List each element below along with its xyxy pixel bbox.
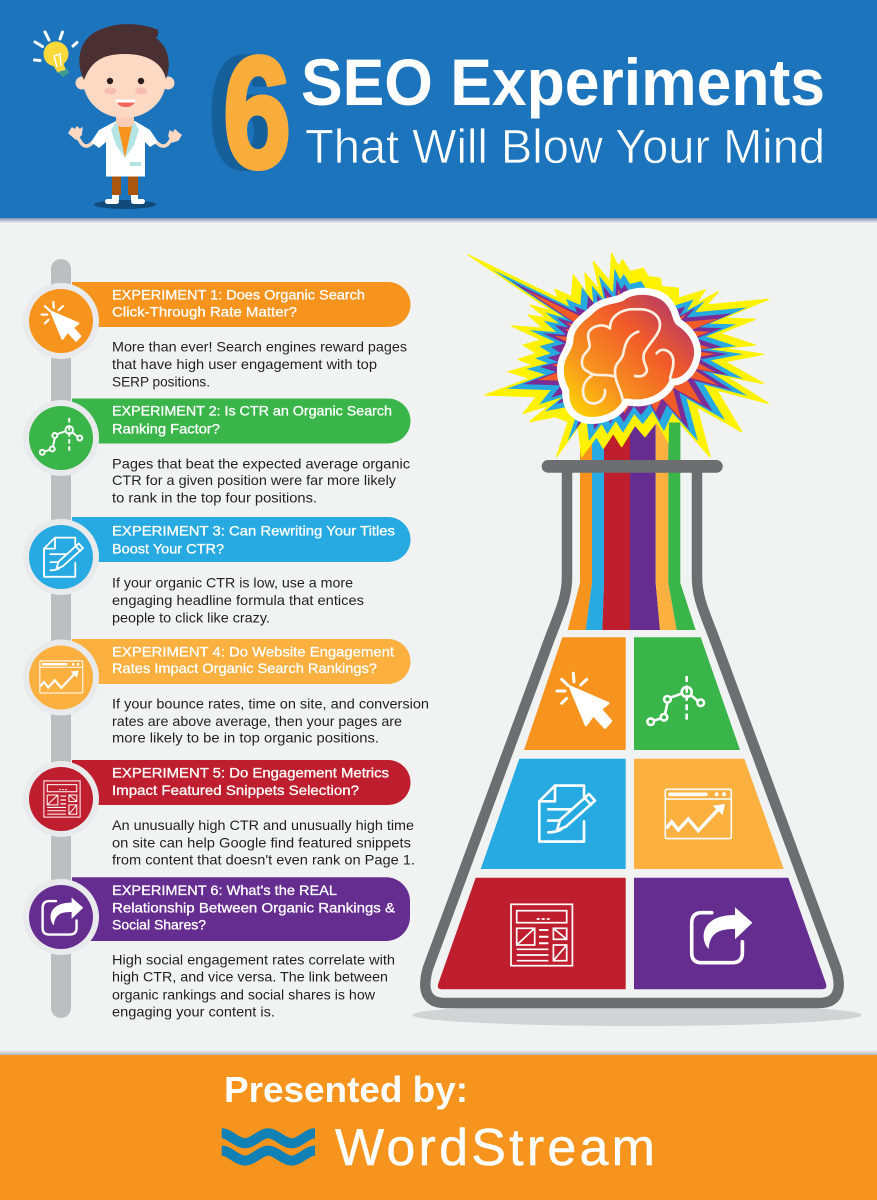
panel: flask cell cursor	[524, 637, 626, 750]
header pill	[72, 282, 411, 327]
badge ring	[23, 283, 99, 359]
icon: cursor	[557, 673, 611, 728]
description: rates are above average, then your pages are	[112, 713, 402, 729]
description: more likely to be in top organic positions.	[112, 730, 379, 746]
icon: scientist character	[69, 24, 181, 209]
description: organic rankings and social shares is how	[112, 986, 376, 1002]
icon: chart nodes	[40, 418, 82, 455]
description: high CTR, and vice versa. The link between	[112, 969, 388, 985]
heading	[112, 882, 396, 933]
icon: brain	[564, 295, 694, 417]
panel: flask cell document	[481, 759, 626, 869]
description: An unusually high CTR and unusually high time	[112, 817, 414, 833]
icon: cursor	[42, 302, 80, 341]
smile	[116, 100, 136, 107]
heading: Impact Featured Snippets Selection?	[112, 782, 359, 798]
title line 2: That Will Blow Your Mind	[305, 121, 825, 174]
badge	[29, 525, 93, 589]
icon: browser with trend	[40, 661, 83, 693]
description	[112, 951, 395, 1020]
face	[83, 42, 166, 118]
header banner	[0, 0, 877, 223]
presented by label: Presented by:	[224, 1069, 468, 1110]
heading	[112, 523, 395, 556]
WordStream wordmark: WordStream	[335, 1119, 655, 1177]
description: on site can help Google find featured snippets	[112, 835, 411, 851]
timeline rail	[51, 259, 71, 1018]
panel: experiment 4	[23, 639, 429, 746]
title line 1: SEO Experiments	[301, 45, 825, 119]
heading: EXPERIMENT 5: Do Engagement Metrics	[112, 765, 389, 781]
header pill	[72, 639, 411, 684]
hair	[79, 24, 169, 80]
heading: EXPERIMENT 2: Is CTR an Organic Search	[112, 403, 392, 419]
explosion burst	[468, 253, 768, 457]
panel: experiment 2	[23, 398, 411, 506]
icon: WordStream waves logo	[222, 1133, 315, 1161]
green stripe top	[668, 422, 680, 462]
heading	[112, 765, 389, 798]
heading: EXPERIMENT 4: Do Website Engagement	[112, 643, 394, 659]
description: from content that doesn't even rank on Page 1.	[112, 851, 415, 867]
badge	[29, 289, 93, 353]
icon: share	[692, 907, 752, 963]
description: to rank in the top four positions.	[112, 490, 317, 506]
flask ground shadow	[412, 1004, 862, 1026]
panel: experiment 3	[23, 517, 411, 626]
badge	[29, 767, 93, 831]
legs and shoes	[105, 174, 145, 204]
panel: flask cell share	[634, 878, 826, 989]
neck	[116, 112, 134, 127]
big number 6: 6	[216, 25, 284, 201]
icon: share	[43, 897, 83, 935]
icon: browser with trend	[665, 789, 731, 839]
heading: Boost Your CTR?	[112, 540, 224, 556]
big number 6: 6	[209, 25, 277, 201]
description: Pages that beat the expected average organic	[112, 455, 410, 471]
heading: EXPERIMENT 6: What's the REAL	[112, 882, 337, 898]
heading	[112, 403, 392, 436]
heading: Click-Through Rate Matter?	[112, 304, 297, 320]
shadow under feet	[94, 200, 156, 209]
header pill	[72, 517, 411, 562]
panel: experiment 1	[23, 282, 411, 390]
heading: EXPERIMENT 3: Can Rewriting Your Titles	[112, 523, 395, 539]
badge ring	[23, 400, 99, 476]
heading: Relationship Between Organic Rankings &	[112, 900, 396, 916]
description: that have high user engagement with top	[112, 356, 377, 372]
description	[112, 695, 429, 746]
description: engaging headline formula that entices	[112, 592, 364, 608]
flask outline	[425, 472, 839, 1003]
heading	[112, 643, 394, 676]
rainbow liquid stripes	[568, 423, 696, 630]
badge	[29, 885, 93, 949]
badge ring	[23, 761, 99, 837]
panel: flask cell chart	[634, 637, 740, 750]
description: engaging your content is.	[112, 1004, 275, 1020]
heading: Rates Impact Organic Search Rankings?	[112, 660, 377, 676]
description: people to click like crazy.	[112, 610, 270, 626]
icon: document and pen	[539, 786, 595, 842]
icon: lightbulb	[34, 32, 77, 77]
heading: EXPERIMENT 1: Does Organic Search	[112, 286, 365, 302]
description: High social engagement rates correlate with	[112, 951, 395, 967]
panel: experiment 6	[23, 877, 410, 1020]
badge ring	[23, 879, 99, 955]
description	[112, 817, 415, 867]
lab coat	[91, 121, 158, 176]
panel: experiment 5	[23, 760, 415, 867]
panel: flask cell news	[438, 878, 626, 989]
badge	[29, 406, 93, 470]
description: CTR for a given position were far more likely	[112, 472, 396, 488]
ears	[76, 76, 174, 90]
arms and hands	[69, 127, 181, 146]
footer banner	[0, 1050, 877, 1200]
heading: Social Shares?	[112, 917, 206, 933]
badge ring	[23, 519, 99, 595]
header pill	[72, 760, 411, 805]
description: More than ever! Search engines reward pages	[112, 339, 407, 355]
icon: news layout	[44, 781, 80, 817]
heading	[112, 286, 365, 320]
icon: news layout	[511, 904, 572, 966]
badge	[29, 646, 93, 710]
header pill	[72, 877, 410, 941]
badge ring	[23, 640, 99, 716]
description: If your bounce rates, time on site, and conversion	[112, 695, 429, 711]
description: SERP positions.	[112, 374, 210, 390]
panel: flask cell browser	[634, 759, 784, 869]
big number 6: 6	[223, 25, 291, 201]
flask	[425, 460, 839, 1003]
description	[112, 339, 407, 390]
heading: Ranking Factor?	[112, 420, 220, 436]
description	[112, 575, 364, 626]
eyes and cheeks	[104, 78, 147, 94]
flask rim	[542, 460, 723, 473]
description: If your organic CTR is low, use a more	[112, 575, 353, 591]
description	[112, 455, 410, 506]
header pill	[72, 398, 411, 444]
icon: chart nodes	[647, 676, 704, 725]
icon: document and pen	[44, 538, 83, 577]
